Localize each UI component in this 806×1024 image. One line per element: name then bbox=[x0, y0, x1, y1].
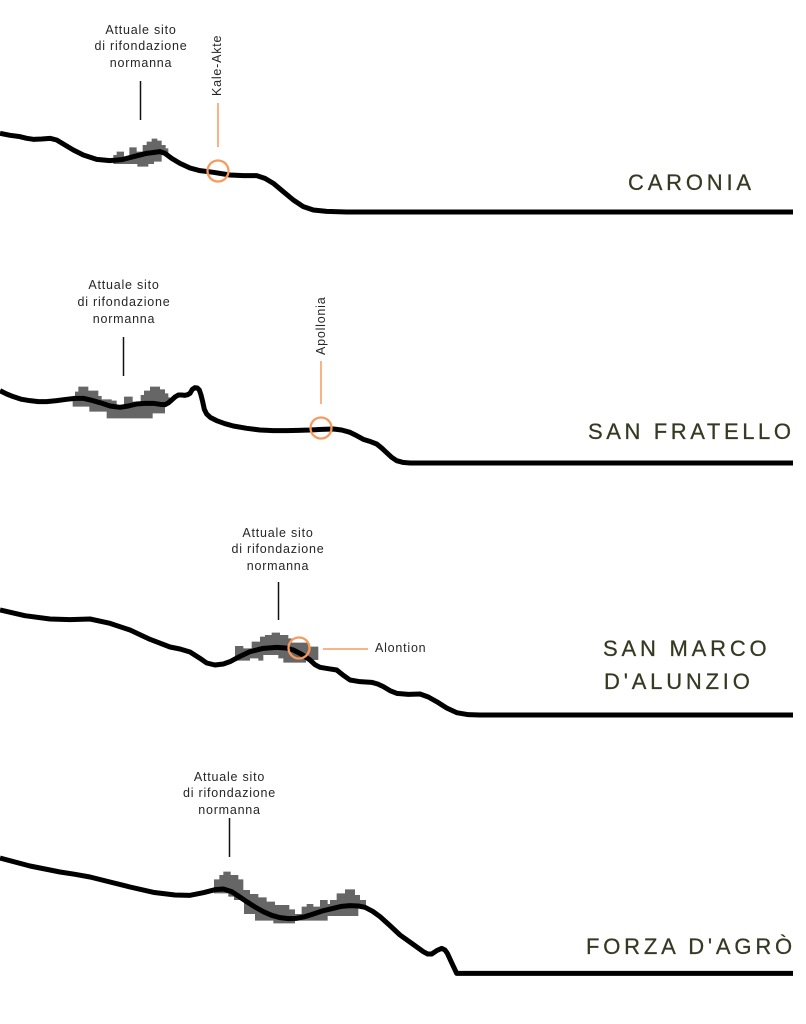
marker: Alontion circle bbox=[288, 638, 310, 658]
terrain profile: Forza d'Agrò bbox=[0, 858, 793, 973]
text: San Fratello refoundation label: normanna bbox=[93, 312, 155, 326]
text: Forza d'Agrò refoundation label: Attuale sito bbox=[194, 770, 265, 784]
text: Forza d'Agrò refoundation label: normanna bbox=[198, 803, 261, 817]
leader line: Kale-Akte bbox=[217, 103, 219, 147]
text: Kale-Akte label: Kale-Akte bbox=[210, 35, 224, 96]
terrain profile: San Marco bbox=[0, 610, 793, 715]
icon: San Fratello town buildings bbox=[73, 387, 170, 418]
leader line: Caronia site bbox=[140, 81, 142, 120]
text: Caronia refoundation label: di rifondazione bbox=[94, 39, 188, 53]
title: Caronia: CARONIA bbox=[628, 170, 755, 195]
icon: Caronia town buildings bbox=[113, 139, 168, 167]
marker: Apollonia circle bbox=[310, 418, 332, 438]
marker: Kale-Akte circle bbox=[208, 160, 228, 182]
panel: San Marco d'Alunzio bbox=[0, 526, 793, 715]
icon: San Marco town buildings bbox=[235, 633, 318, 663]
leader line: Apollonia bbox=[320, 361, 322, 404]
text: San Fratello refoundation label: di rifondazione bbox=[77, 295, 171, 309]
text: San Marco refoundation label: normanna bbox=[247, 559, 309, 573]
title: San Fratello: SAN FRATELLO bbox=[588, 419, 795, 444]
text: Alontion label: Alontion bbox=[375, 641, 426, 655]
text: Apollonia label: Apollonia bbox=[314, 297, 328, 355]
text: Caronia refoundation label: normanna bbox=[110, 56, 172, 70]
title: Forza d'Agrò: FORZA D'AGRÒ bbox=[586, 934, 796, 959]
text: San Fratello refoundation label: Attuale sito bbox=[88, 278, 160, 292]
leader line: San Marco site bbox=[278, 582, 280, 620]
icon: Forza d'Agrò town buildings bbox=[214, 872, 366, 923]
text: Caronia refoundation label: Attuale sito bbox=[105, 23, 177, 37]
leader line: San Fratello site bbox=[122, 337, 124, 376]
title: San Marco d'Alunzio: D'ALUNZIO bbox=[604, 669, 754, 694]
terrain profile: San Fratello bbox=[0, 388, 793, 463]
leader line: Forza d'Agrò site bbox=[228, 818, 230, 857]
panel: Caronia bbox=[0, 23, 793, 212]
title: San Marco d'Alunzio: SAN MARCO bbox=[603, 636, 770, 661]
text: Forza d'Agrò refoundation label: di rifondazione bbox=[183, 786, 276, 800]
panel: Forza d'Agrò bbox=[0, 770, 796, 973]
terrain profile: Caronia bbox=[0, 133, 793, 212]
text: San Marco refoundation label: di rifondazione bbox=[231, 542, 325, 556]
text: San Marco refoundation label: Attuale sito bbox=[242, 526, 314, 540]
leader line: Alontion bbox=[323, 648, 368, 650]
panel: San Fratello bbox=[0, 278, 795, 463]
